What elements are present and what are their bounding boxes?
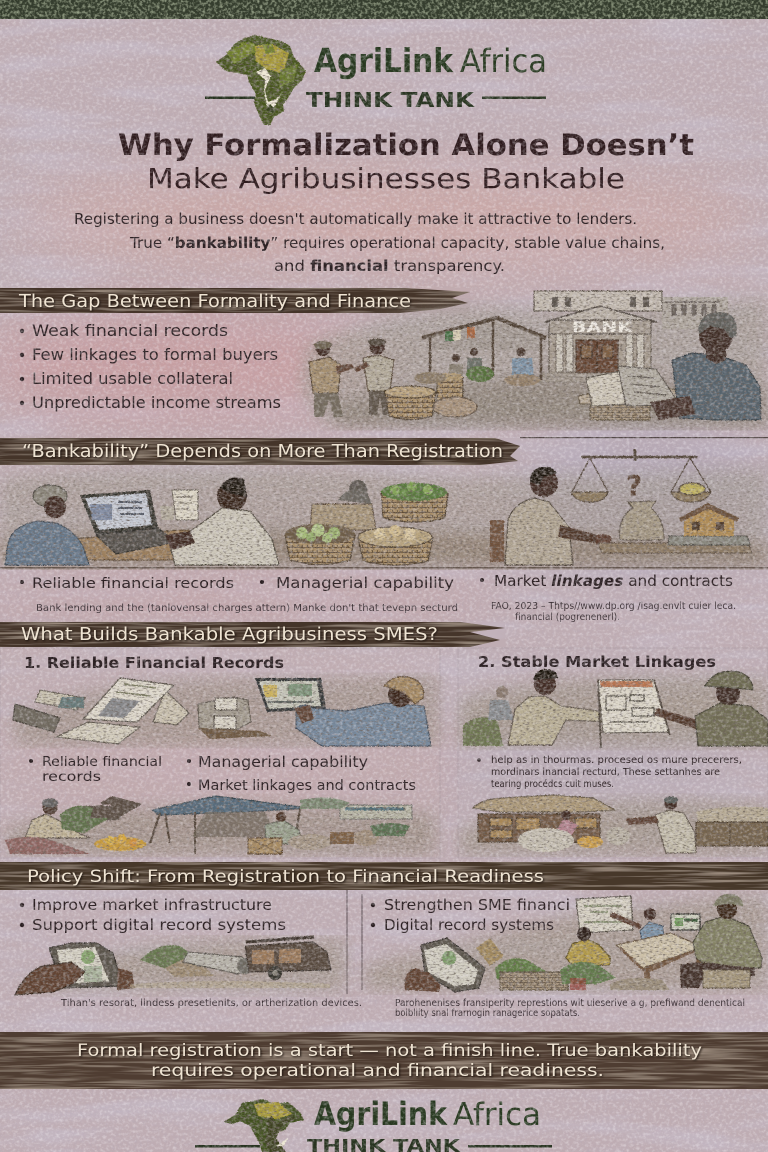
bullet list: Market linkages and contracts bbox=[198, 778, 416, 794]
bullet row: Reliable financial records bbox=[32, 576, 234, 592]
body text bbox=[477, 755, 742, 790]
wordmark: AgriLink bbox=[314, 1095, 448, 1133]
two men at laptop bbox=[5, 478, 279, 565]
logo wordmark bbox=[314, 41, 547, 80]
logo tagline: THINK TANK bbox=[306, 88, 476, 112]
divider line below illustration bbox=[0, 567, 768, 568]
balance scale bbox=[571, 449, 711, 502]
icon: Africa tree bbox=[216, 35, 306, 125]
bullet list: Strengthen SME financi bbox=[384, 896, 570, 914]
bullet list: Improve market infrastructure bbox=[32, 896, 272, 914]
bullet list: Limited usable collateral bbox=[32, 369, 233, 388]
bank building bbox=[534, 291, 663, 382]
logo: AgriLink Africa Think Tank bbox=[205, 35, 547, 125]
bullet list bbox=[20, 896, 286, 934]
card heading: 1. Reliable Financial Records bbox=[24, 654, 284, 672]
illustration: phone and truck bbox=[15, 937, 345, 995]
heading banner: The Gap Between Formality and Finance bbox=[18, 291, 411, 312]
bullet list: Digital record systems bbox=[384, 916, 554, 934]
baskets and stones bbox=[384, 372, 477, 420]
bullet row: Market linkages and contracts bbox=[494, 572, 733, 590]
bullet list: Managerial capability bbox=[198, 753, 368, 771]
heading banner bbox=[0, 862, 768, 890]
icon: tree bbox=[224, 1099, 304, 1152]
source notes: financial (pogrenenerl). bbox=[515, 612, 620, 623]
market stall bbox=[422, 318, 546, 386]
bullet list: Support digital record systems bbox=[32, 916, 286, 934]
produce baskets bbox=[285, 480, 448, 565]
intro text block bbox=[74, 210, 665, 275]
panel: what builds bankable agribusiness SMEs bbox=[0, 622, 768, 858]
caption: Tihan's resorat, lindess presetienits, or artherization devices. bbox=[60, 998, 362, 1009]
bullet list: Few linkages to formal buyers bbox=[32, 345, 278, 364]
illustration: records and tablet bbox=[10, 675, 438, 746]
wordmark bbox=[314, 1095, 541, 1133]
left column bbox=[15, 890, 362, 1009]
caption bbox=[395, 998, 745, 1019]
bullet list: Weak financial records bbox=[32, 321, 228, 340]
question mark: ? bbox=[626, 469, 642, 502]
illustration: records, produce and lender bbox=[0, 449, 768, 566]
bullet list: Reliable financial bbox=[42, 754, 162, 770]
closing callout banner: requires operational and financial readiness. bbox=[151, 1061, 604, 1081]
source notes: FAO, 2023 – Thtps//www.dp.org /isag.envit cuier leca. bbox=[491, 601, 736, 612]
illustration: men at contract board bbox=[460, 669, 768, 748]
body text: tearing procédcs cuit muses. bbox=[491, 779, 614, 790]
intro text block: Registering a business doesn't automatically make it attractive to lenders. bbox=[74, 210, 637, 228]
title bbox=[118, 128, 694, 195]
body text: mordinars inancial recturd, These settanhes are bbox=[491, 767, 720, 778]
illustration: thatched market hut bbox=[460, 795, 768, 855]
heading banner: What Builds Bankable Agribusiness SMES? bbox=[21, 625, 438, 645]
heading banner bbox=[0, 288, 470, 313]
sign text: BANK bbox=[572, 320, 634, 336]
panel: bankability depends on more than registration bbox=[0, 438, 768, 623]
footer logo bbox=[195, 1095, 552, 1152]
intro text block: True “bankability” requires operational capacity, stable value chains, bbox=[129, 234, 665, 252]
card 2: stable market linkages bbox=[458, 648, 768, 858]
card 1: reliable financial records bbox=[0, 648, 440, 858]
title: Why Formalization Alone Doesn’t bbox=[118, 128, 694, 162]
illustration: market and bank bbox=[303, 291, 768, 426]
side building bbox=[662, 297, 728, 329]
divider line bbox=[520, 437, 768, 438]
caption: boibliity snal frarnogin ranagerice sopatats. bbox=[395, 1008, 580, 1019]
bullet list bbox=[20, 321, 281, 412]
bullet list bbox=[371, 896, 570, 934]
bullet list: Unpredictable income streams bbox=[32, 393, 281, 412]
logo wordmark: Africa bbox=[460, 42, 547, 80]
source notes: Bank lending and the (tanlovensal charges attern) Manke don't that tevepn secturd bbox=[36, 603, 458, 614]
illustration: digital systems and planning table bbox=[365, 894, 768, 992]
illustration: market scene with tent bbox=[5, 796, 435, 855]
panel: the gap between formality and finance bbox=[0, 288, 768, 426]
heading banner bbox=[0, 622, 505, 647]
card heading: 2. Stable Market Linkages bbox=[478, 653, 716, 671]
right column bbox=[362, 894, 768, 1019]
body text: help as in thourmas. procesed os mure precerers, bbox=[491, 755, 742, 766]
logo wordmark: AgriLink bbox=[314, 41, 454, 80]
top border band bbox=[0, 0, 768, 19]
bullet list bbox=[29, 753, 416, 794]
man with scale, sack and house bbox=[490, 449, 752, 565]
bullet list: records bbox=[42, 769, 101, 785]
two farmers talking bbox=[309, 338, 394, 417]
intro text block: and financial transparency. bbox=[274, 257, 505, 275]
wordmark: Africa bbox=[453, 1097, 541, 1133]
heading banner: “Bankability” Depends on More Than Registration bbox=[22, 441, 503, 462]
source notes bbox=[36, 601, 736, 623]
bullet row: Managerial capability bbox=[276, 574, 454, 592]
closing callout banner bbox=[0, 1032, 768, 1089]
heading banner: Policy Shift: From Registration to Financial Readiness bbox=[27, 867, 544, 887]
heading banner bbox=[0, 438, 520, 465]
caption: Parohenenises fransiperity represtions wit uieserive a g, prefiwand denentical bbox=[395, 998, 745, 1009]
title: Make Agribusinesses Bankable bbox=[147, 163, 625, 195]
bullet row bbox=[20, 572, 733, 592]
panel: policy shift bbox=[0, 862, 768, 1019]
closing callout banner: Formal registration is a start — not a finish line. True bankability bbox=[77, 1041, 702, 1061]
seated banker with documents bbox=[578, 312, 761, 420]
